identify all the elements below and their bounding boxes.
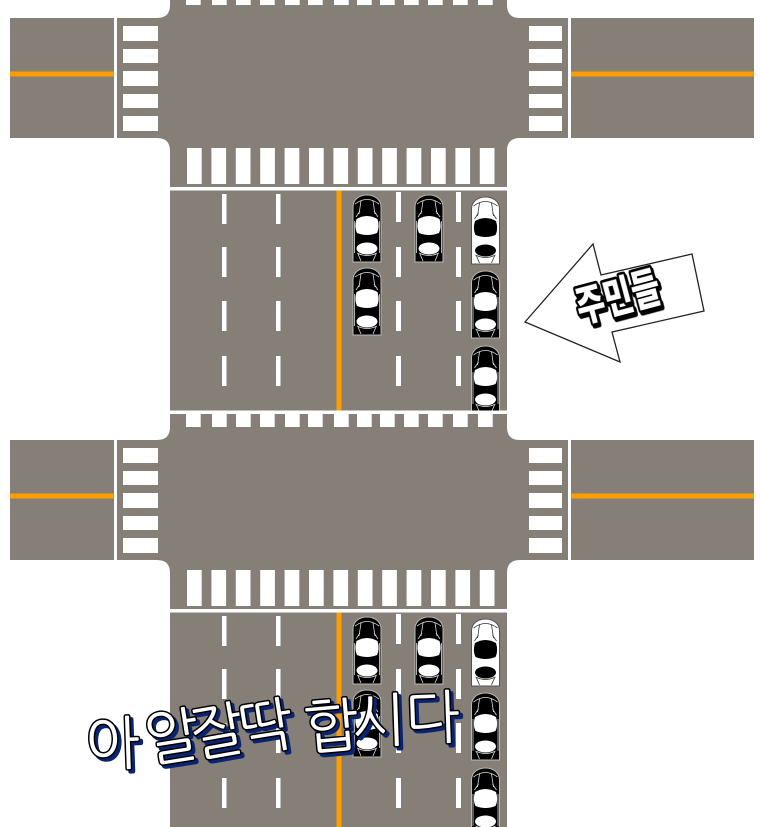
arrow with label: residents — [525, 244, 704, 362]
east crosswalk — [529, 26, 562, 131]
north crosswalk — [186, 0, 493, 5]
east road — [571, 18, 754, 138]
junction surface — [117, 0, 568, 187]
west crosswalk — [123, 448, 158, 553]
south crosswalk — [187, 148, 494, 184]
west road — [10, 440, 114, 560]
west road — [10, 18, 114, 138]
parked cars — [353, 195, 510, 414]
panel: upper intersection — [10, 0, 754, 414]
south crosswalk — [187, 570, 494, 606]
south road — [170, 190, 507, 410]
panel: lower intersection — [10, 414, 754, 827]
parked cars — [353, 617, 500, 827]
east crosswalk — [529, 448, 562, 553]
junction surface — [117, 414, 568, 609]
slogan text: 아알잘딱합시다 — [84, 685, 461, 778]
south road — [170, 612, 507, 827]
east road — [571, 440, 754, 560]
north crosswalk — [186, 414, 493, 427]
arrow with label: residents: 주민들 — [571, 264, 666, 331]
west crosswalk — [123, 26, 158, 131]
